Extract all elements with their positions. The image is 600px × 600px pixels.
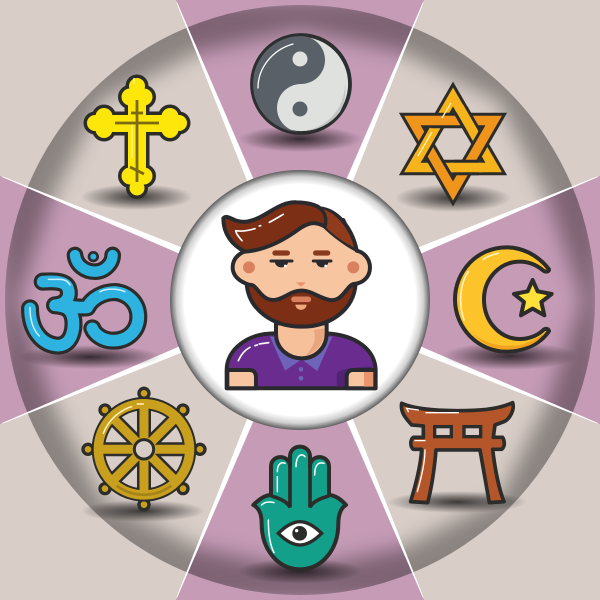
neck xyxy=(276,323,327,358)
icon: star of david xyxy=(412,97,494,191)
arms xyxy=(227,370,256,388)
hair xyxy=(223,202,357,252)
icon: hamsa hand xyxy=(253,447,346,569)
icon: yin yang xyxy=(252,35,350,133)
face xyxy=(233,220,370,300)
icon: orthodox cross xyxy=(87,78,187,196)
icon: bearded man xyxy=(223,202,376,388)
beard xyxy=(247,270,356,327)
icon: dharma wheel xyxy=(83,388,205,510)
eyes and brows xyxy=(275,245,328,261)
icon: om xyxy=(30,252,138,346)
collar xyxy=(270,337,332,371)
shirt xyxy=(227,333,376,388)
center medallion xyxy=(170,170,430,430)
icon: crescent and star xyxy=(455,247,552,352)
icon shadows xyxy=(18,126,578,584)
icon: torii gate xyxy=(401,403,513,503)
nose and mouth xyxy=(296,282,306,287)
